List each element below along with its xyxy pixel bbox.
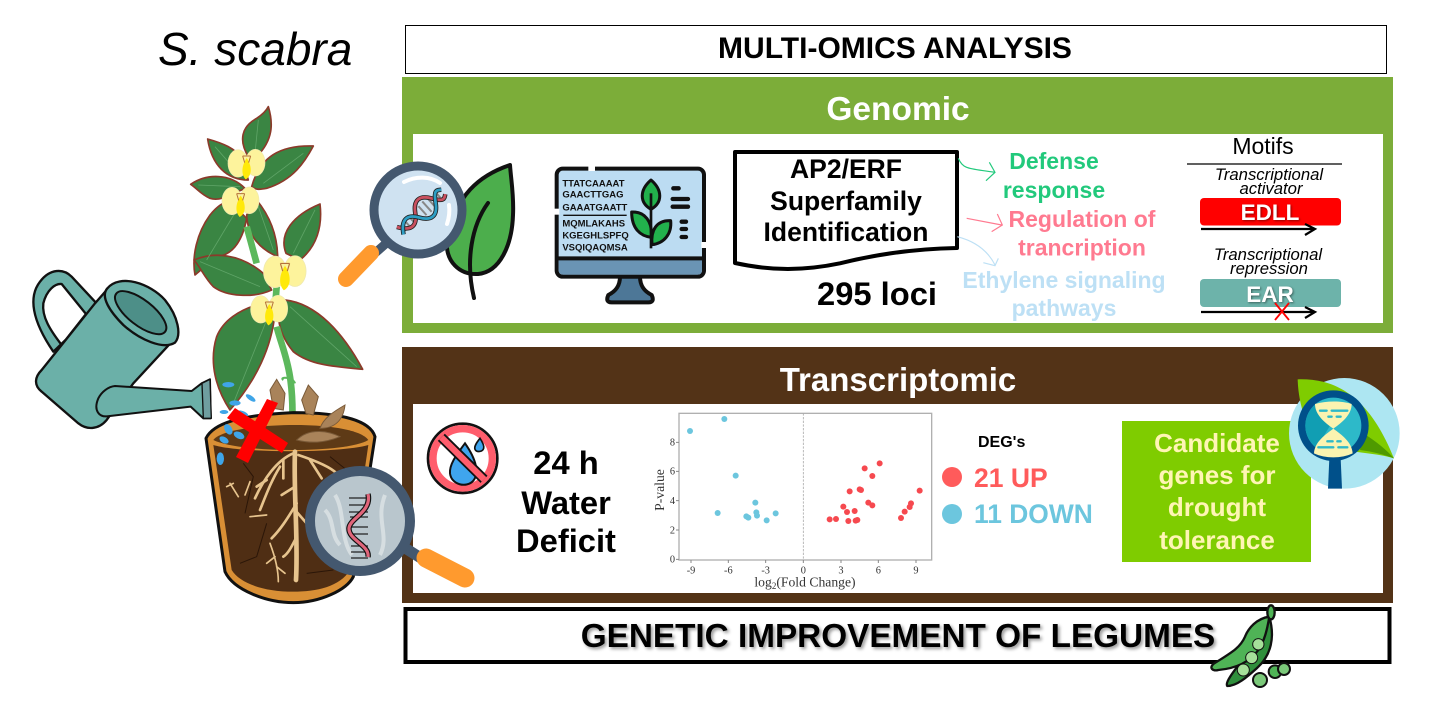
icon: computer with sequences: KGEGHLSPFQ xyxy=(562,230,629,241)
panel: genomic xyxy=(402,77,1393,333)
icon: computer with sequences: VSQIQAQMSA xyxy=(562,242,628,253)
text: regulation of transcription: Regulation of xyxy=(1009,206,1155,232)
callout: candidate genes: Candidate xyxy=(1154,428,1280,458)
chart: volcano plot: -3 xyxy=(761,565,770,576)
header: multi-omics analysis xyxy=(406,26,1386,74)
footer: genetic improvement of legumes: GENETIC IMPROVEMENT OF LEGUMES xyxy=(581,618,1215,655)
species title: S. scabra xyxy=(158,23,352,75)
document: AP2/ERF superfamily identification xyxy=(735,152,957,269)
chart: volcano plot: (Fold Change) xyxy=(776,574,856,590)
EAR motif: EAR xyxy=(1246,282,1294,307)
legend item: up: 21 UP xyxy=(974,463,1048,493)
illustration: dry pot with roots xyxy=(206,379,375,603)
chart: volcano plot: 6 xyxy=(670,467,675,478)
icon: computer with sequences: MQMLAKAHS xyxy=(562,219,625,230)
legend item: down: 11 DOWN xyxy=(974,499,1093,529)
arrow: to ethylene signaling xyxy=(957,237,998,266)
chart: volcano plot: log xyxy=(754,574,772,589)
document: AP2/ERF superfamily identification: Identification xyxy=(764,217,928,247)
chart: volcano plot xyxy=(652,413,932,591)
document: AP2/ERF superfamily identification: AP2/ERF xyxy=(790,154,902,184)
transcriptomic heading: Transcriptomic xyxy=(780,361,1016,398)
document: AP2/ERF superfamily identification: Superfamily xyxy=(770,186,922,216)
arrow: to defense response xyxy=(958,158,995,181)
icon: no water xyxy=(428,424,497,493)
callout: candidate genes: drought xyxy=(1168,492,1266,522)
motifs block xyxy=(1187,133,1342,320)
icon: computer with sequences: TTATCAAAAT xyxy=(562,179,625,190)
EDLL motif xyxy=(1200,198,1341,235)
illustration: watering can xyxy=(33,271,211,428)
callout: candidate genes: genes for xyxy=(1158,460,1276,490)
text: 24 h water deficit: Water xyxy=(521,484,611,521)
text: ethylene signaling pathways: Ethylene signaling xyxy=(962,267,1166,293)
genomic heading: Genomic xyxy=(826,91,970,128)
icon: magnifier with DNA helix xyxy=(346,166,462,279)
repression label: Transcriptional xyxy=(1214,245,1322,264)
legend item: up xyxy=(942,463,1048,493)
chart: volcano plot: 3 xyxy=(838,565,844,576)
icon: green leaf xyxy=(447,165,513,298)
chart: volcano plot: 2 xyxy=(670,525,675,536)
activator label: Transcriptional xyxy=(1215,165,1323,184)
chart: volcano plot: 0 xyxy=(670,555,675,566)
chart: volcano plot: -6 xyxy=(724,565,733,576)
motifs heading: Motifs xyxy=(1232,133,1294,159)
text: defense response: response xyxy=(1003,177,1105,203)
legend: DEG counts: DEG's xyxy=(978,434,1025,451)
icon: computer with sequences xyxy=(554,165,707,302)
icon: computer with sequences: GAACTTGAG xyxy=(562,190,623,201)
icon: computer with sequences: GAAATGAATT xyxy=(562,202,628,213)
text: 24 h water deficit: 24 h xyxy=(533,444,599,481)
arrow: to regulation of transcription xyxy=(967,214,1002,232)
activator label: activator xyxy=(1239,179,1304,198)
chart: volcano plot: P-value xyxy=(652,469,667,511)
chart: volcano plot: 9 xyxy=(913,565,919,576)
header: multi-omics analysis: MULTI-OMICS ANALYSIS xyxy=(718,32,1072,65)
chart: volcano plot: -9 xyxy=(687,565,695,576)
EDLL motif: EDLL xyxy=(1241,200,1300,225)
text: ethylene signaling pathways: pathways xyxy=(1012,295,1116,321)
callout: candidate genes xyxy=(1122,421,1311,562)
text: defense response: Defense xyxy=(1009,148,1099,174)
text: regulation of transcription: trancription xyxy=(1018,234,1146,260)
chart: volcano plot: 0 xyxy=(801,565,806,576)
panel: transcriptomic xyxy=(402,347,1393,603)
chart: volcano plot: 2 xyxy=(772,581,776,591)
illustration: plant xyxy=(191,107,363,432)
icon: pea pod xyxy=(1211,605,1290,687)
chart: volcano plot: 8 xyxy=(670,438,675,449)
chart: volcano plot: 4 xyxy=(670,496,675,507)
footer: genetic improvement of legumes xyxy=(406,609,1390,662)
chart: volcano plot: 6 xyxy=(876,565,881,576)
EAR motif xyxy=(1200,279,1341,320)
text: 24 h water deficit: Deficit xyxy=(516,522,616,559)
icon: magnifier with RNA strand xyxy=(310,471,465,578)
loci count: 295 loci xyxy=(817,275,937,312)
repression label: repression xyxy=(1230,259,1308,278)
icon: red cross xyxy=(227,399,288,463)
icon: water drops xyxy=(217,382,257,465)
callout: candidate genes: tolerance xyxy=(1159,525,1275,555)
legend: DEG counts xyxy=(942,434,1093,529)
icon: DNA magnifier with leaf xyxy=(1289,378,1400,489)
